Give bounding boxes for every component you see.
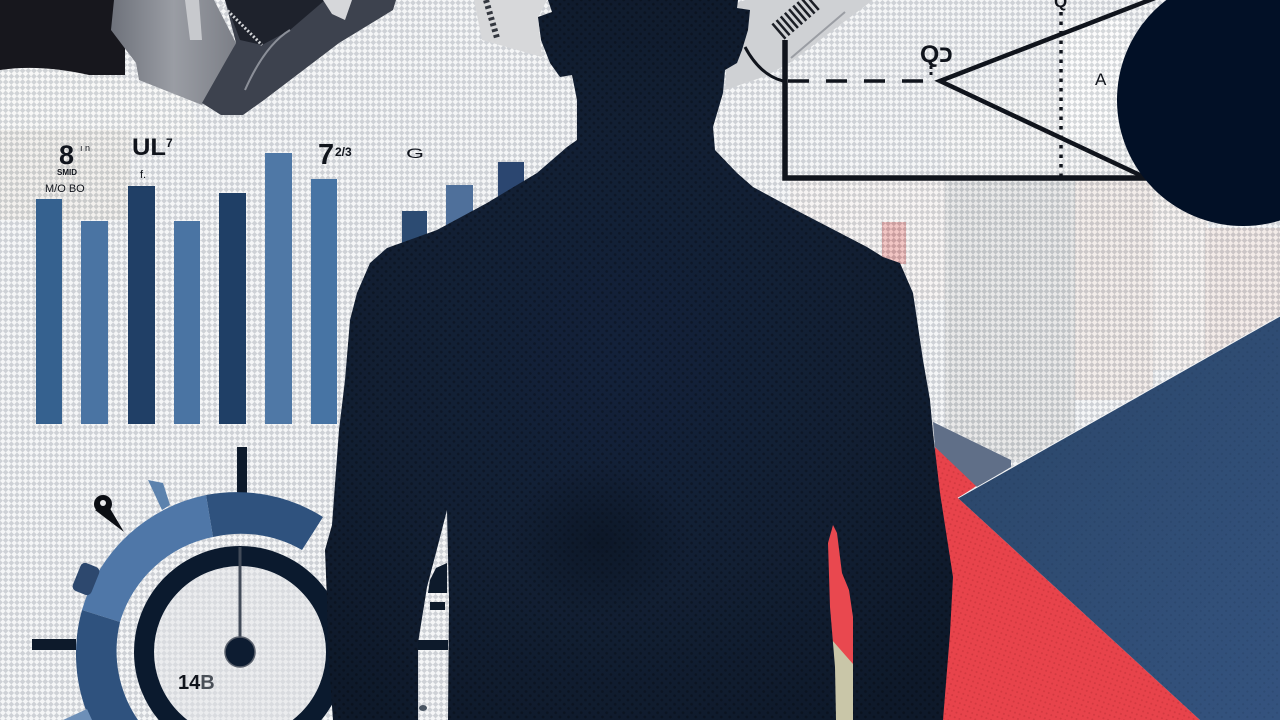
- chart label: 8: ı n: [80, 143, 90, 153]
- grey wedge: [933, 422, 1011, 487]
- red carpet: [925, 447, 1200, 720]
- small arm-gap icons: [419, 563, 447, 711]
- paper fragment: top centre: [474, 0, 547, 57]
- geometric diagram: [785, 0, 1155, 178]
- red behind arm gap: [820, 520, 860, 720]
- bar chart: [36, 153, 524, 424]
- chart label: 8: 8: [59, 140, 74, 170]
- gauge side spike: [148, 480, 170, 510]
- gauge needle: [225, 547, 255, 667]
- photo fragment: torn dark material: [0, 0, 396, 115]
- gauge inner ring: [144, 556, 336, 720]
- chart label: G: G: [406, 145, 424, 161]
- chart label: UL: UL: [132, 134, 166, 161]
- chart label: 8: SMID: [57, 168, 77, 177]
- silhouette of a man: [325, 0, 953, 720]
- paper fragment: top right with comb: [725, 0, 873, 90]
- diagram letter A: A: [1095, 70, 1107, 89]
- diagram label: Qכ: [920, 41, 953, 68]
- chart label: UL: 7: [166, 136, 173, 150]
- gauge value: 14B: [178, 672, 215, 694]
- chart label: UL: f.: [140, 169, 146, 181]
- chart label: 8: [45, 140, 90, 195]
- gauge side knob: [71, 561, 101, 597]
- dark circle: [1117, 0, 1280, 226]
- blue triangle: [958, 316, 1280, 720]
- chart label: 7 2/3: 7: [318, 139, 334, 171]
- gauge tick marks: [32, 447, 448, 650]
- chart label: 7 2/3: 2/3: [335, 145, 352, 159]
- chart label: 8: M/O BO: [45, 183, 85, 195]
- gauge: [32, 447, 448, 720]
- icon: pin: [94, 495, 124, 532]
- chart label: 7 2/3: [318, 139, 352, 171]
- gauge outer segments: [63, 492, 323, 720]
- chart label: UL: [132, 134, 173, 181]
